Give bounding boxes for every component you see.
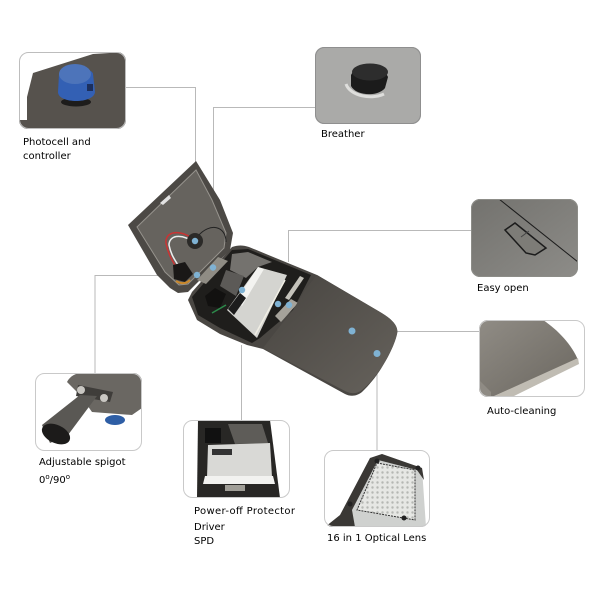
label: driver: Driver: [194, 522, 226, 533]
label: controller: controller: [23, 151, 72, 162]
label: SPD: SPD: [194, 536, 214, 547]
panel: easy open: [471, 199, 578, 294]
blue marker dots: [192, 238, 380, 357]
open lid: [128, 161, 233, 293]
icon: latch: [505, 223, 546, 255]
label: power-off protector: Power-off Protector: [194, 506, 296, 517]
label: photocell: Photocell and: [23, 137, 91, 148]
terminal block: [205, 288, 226, 308]
leader lines: [95, 88, 479, 450]
panel: power-off protector, driver, SPD: [184, 420, 296, 517]
label: auto-cleaning: Auto-cleaning: [487, 406, 556, 417]
icon: blue photocell: [58, 64, 95, 106]
panel: auto-cleaning: [479, 320, 584, 417]
icon: black breather cap: [351, 64, 388, 94]
label: easy open: Easy open: [477, 283, 529, 294]
panel: breather: [315, 47, 421, 140]
panel: photocell and controller: [19, 52, 126, 148]
label: adjustable spigot: Adjustable spigot: [39, 457, 126, 468]
lens cover panel: [263, 275, 397, 393]
luminaire body: [188, 246, 397, 396]
label: 0/90 degrees: o: [45, 473, 50, 481]
panel: optical lens: [324, 450, 430, 544]
label: 0/90 degrees: /90: [50, 475, 66, 486]
label: optical lens: 16 in 1 Optical Lens: [327, 533, 426, 544]
main luminaire, opened: [128, 161, 397, 396]
driver: [227, 267, 287, 338]
label: 0/90 degrees: o: [66, 473, 70, 481]
interior: [192, 249, 311, 343]
label: 0/90 degrees: 0: [39, 475, 45, 486]
label: breather: Breather: [321, 129, 365, 140]
bracket and rod: [285, 276, 304, 300]
panel: adjustable spigot: [36, 373, 142, 468]
